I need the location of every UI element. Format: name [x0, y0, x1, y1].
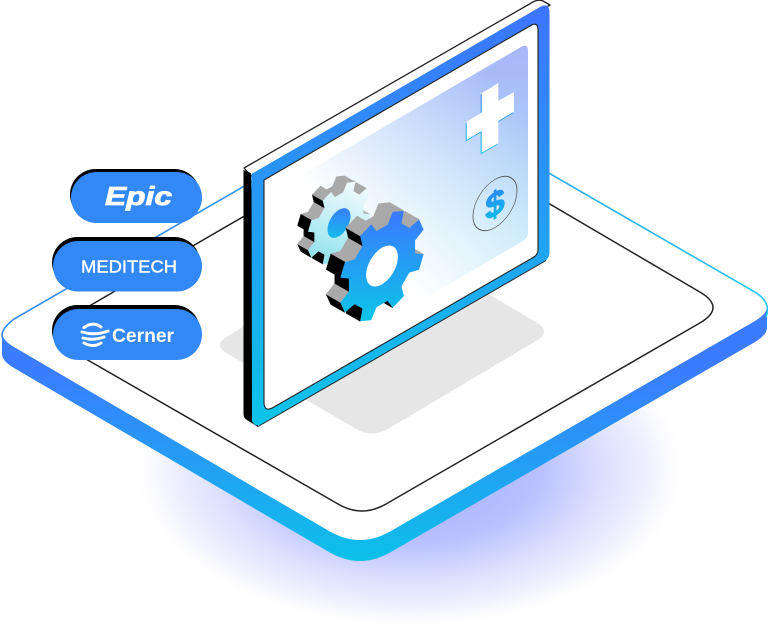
- monitor left side: [244, 170, 258, 427]
- platform top rim line: [2, 99, 768, 341]
- platform: [2, 99, 768, 561]
- icon: gears: [297, 157, 424, 346]
- pill: MEDITECH: [52, 237, 202, 292]
- pill: Epic: [70, 169, 202, 223]
- Epic wordmark: Epic: [105, 181, 173, 211]
- icon: Cerner globe: [82, 324, 108, 346]
- MEDITECH wordmark: MEDITECH: [81, 256, 177, 276]
- monitor: [244, 0, 550, 427]
- platform top face: [2, 99, 767, 540]
- monitor front frame: [252, 5, 550, 425]
- monitor front lower edge: [258, 260, 546, 426]
- screen gradient panel: [275, 46, 528, 385]
- icon: medical cross: [466, 83, 514, 154]
- monitor floor shadow: [220, 243, 544, 434]
- big gear: [326, 178, 424, 346]
- platform inner outline: [54, 128, 713, 511]
- glow under platform: [130, 310, 690, 630]
- small gear: [297, 157, 370, 283]
- monitor top edge: [244, 0, 550, 176]
- platform side band: [2, 120, 767, 561]
- icon: dollar coin: $: [485, 180, 505, 230]
- icon: dollar coin: [473, 167, 517, 240]
- pill: Cerner: [52, 305, 202, 360]
- monitor screen: [264, 24, 538, 409]
- Cerner wordmark: Cerner: [112, 326, 175, 347]
